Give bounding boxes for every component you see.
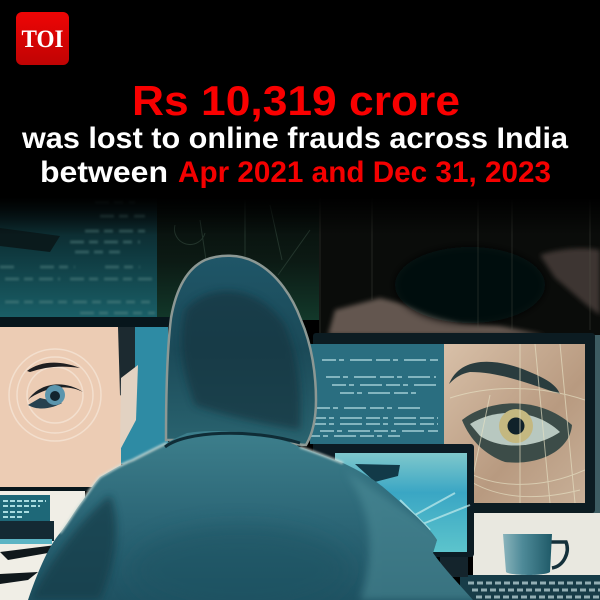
hood shading bbox=[182, 291, 301, 430]
dark map shape bbox=[355, 464, 400, 482]
close-up eye bbox=[449, 344, 585, 503]
middle monitor bbox=[315, 444, 474, 577]
face on screen bbox=[0, 327, 121, 487]
TOI logo: TOI bbox=[22, 26, 64, 53]
mug body bbox=[503, 534, 552, 575]
eye bbox=[28, 384, 83, 409]
keys bbox=[468, 583, 600, 597]
laptop screen text bbox=[3, 501, 46, 517]
iris bbox=[499, 409, 533, 443]
white desk, right side bbox=[473, 513, 600, 600]
code screen bbox=[310, 344, 444, 444]
faded beige skin patches bbox=[328, 248, 600, 335]
screen lines bbox=[400, 493, 470, 530]
monitor frame bbox=[313, 333, 595, 513]
cheek bbox=[120, 365, 138, 450]
code lines bbox=[306, 360, 438, 436]
right background edge bbox=[585, 335, 600, 515]
hacker in a hoodie bbox=[28, 256, 480, 600]
right monitor bbox=[306, 333, 595, 513]
left data panel bbox=[0, 190, 157, 320]
hood bbox=[166, 256, 316, 445]
centre dark panel bbox=[157, 190, 319, 320]
keyboard bbox=[460, 575, 600, 600]
biometric grid bbox=[450, 344, 585, 503]
background photo: dim wall panels bbox=[0, 185, 600, 335]
TOI logo bbox=[16, 12, 69, 65]
fade to black under the headline bbox=[0, 185, 600, 235]
eyebrow bbox=[449, 362, 560, 394]
headline: line two: was lost to online frauds across India bbox=[21, 122, 569, 155]
laptop keyboard bbox=[0, 521, 54, 541]
monitor frame bbox=[315, 444, 474, 557]
right dim eye panel bbox=[319, 190, 600, 335]
screen bbox=[335, 453, 467, 552]
eyebrow bbox=[27, 363, 80, 372]
eye photo screen bbox=[444, 344, 585, 503]
dark eye iris area bbox=[395, 247, 545, 323]
hair bbox=[118, 327, 135, 400]
monitor stand bbox=[440, 557, 468, 577]
white desk bbox=[0, 491, 85, 600]
left laptop and desk bbox=[0, 491, 85, 600]
headline: amount: Rs 10,319 crore bbox=[132, 77, 460, 124]
sweatshirt light edge bbox=[60, 443, 343, 533]
monitor frame bbox=[0, 317, 170, 491]
faint vertical lines bbox=[320, 190, 590, 335]
cyan laptop edge bbox=[0, 539, 52, 544]
laptop screen bbox=[0, 495, 50, 521]
centre panel faint lines bbox=[174, 200, 310, 300]
teal screen area bbox=[118, 327, 168, 464]
hood collar line bbox=[165, 433, 300, 447]
logo-like dark shape bbox=[0, 228, 60, 252]
coffee mug bbox=[503, 534, 567, 575]
sweatshirt body bbox=[28, 431, 473, 600]
eyeball bbox=[470, 413, 560, 446]
sleeve seam and shadows bbox=[30, 470, 480, 600]
dark cables bbox=[0, 545, 56, 584]
scan rings bbox=[9, 349, 101, 441]
mug handle bbox=[548, 542, 567, 568]
eye socket shadow bbox=[462, 403, 572, 463]
headline: line three: Apr 2021 and Dec 31, 2023 bbox=[178, 156, 551, 189]
left monitor bbox=[0, 317, 170, 491]
dim code text on the left panel bbox=[0, 202, 155, 313]
headline: line three: between bbox=[40, 156, 168, 189]
